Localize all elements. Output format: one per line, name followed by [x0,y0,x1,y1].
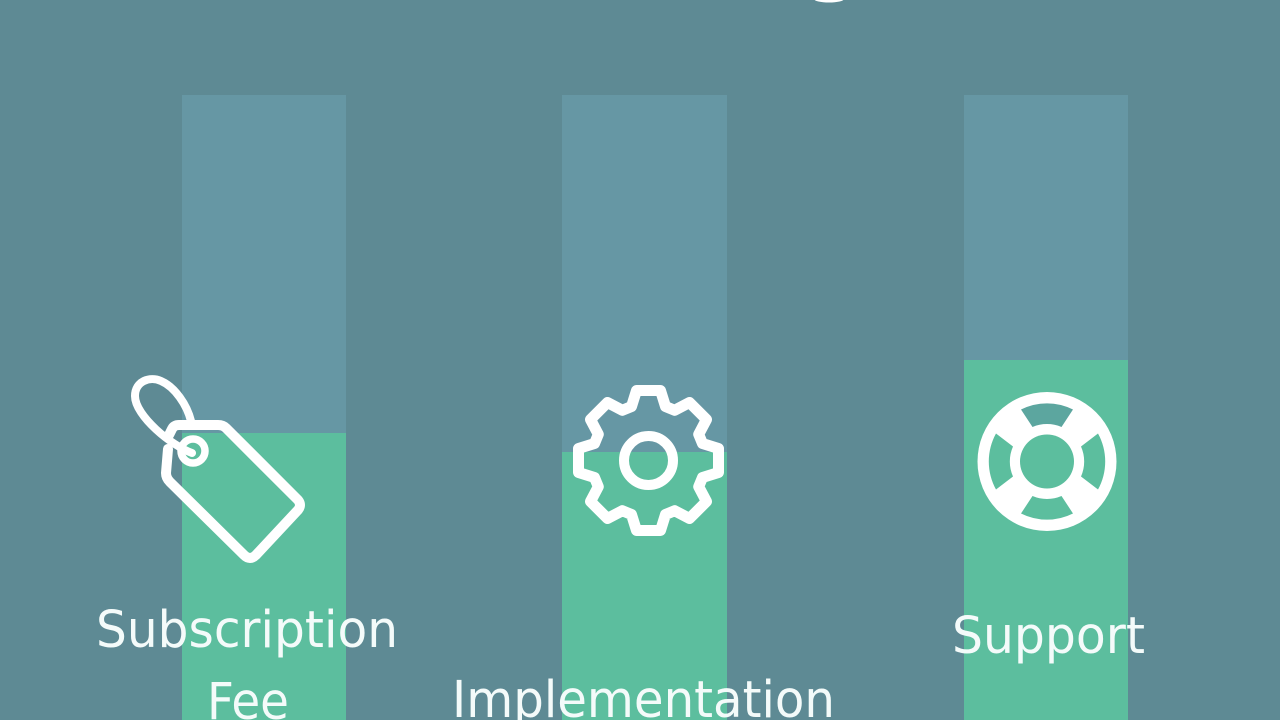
column: support [952,95,1145,720]
bar fill: subscription fee [182,433,346,720]
column: subscription fee [96,95,398,720]
icon: price tag [135,379,300,558]
title descender fragment cropped at top edge [814,0,844,2]
bar track: support [964,95,1128,720]
bar track: implementation [562,95,727,720]
label: support: Support [952,607,1145,666]
bar track: subscription fee [182,95,346,720]
icon: lifebuoy [978,392,1116,531]
label: subscription fee: Subscription [96,601,398,660]
icon: gear [578,390,718,530]
label: subscription fee [96,601,398,720]
bar fill: implementation [562,452,727,720]
bar fill: support [964,360,1128,720]
column: implementation [452,95,835,720]
